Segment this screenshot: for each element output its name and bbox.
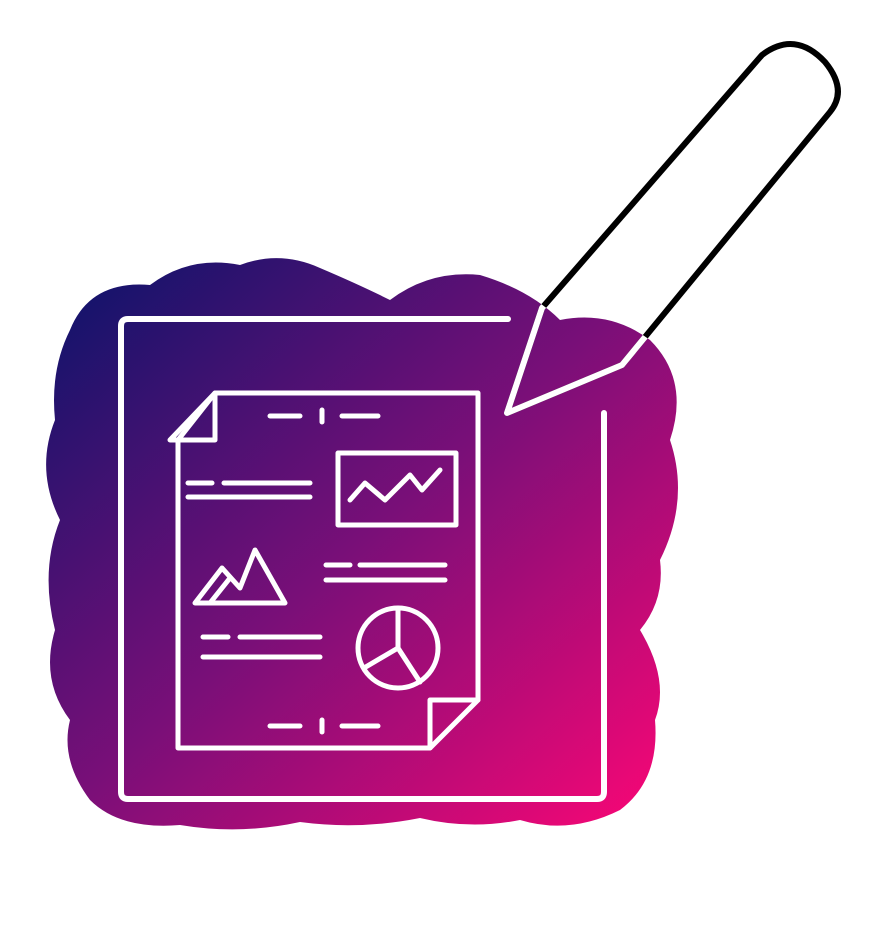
frame — [121, 319, 604, 799]
left text lines — [188, 483, 310, 497]
pie chart — [358, 608, 438, 688]
right text lines — [326, 565, 445, 580]
top dashes — [270, 410, 378, 422]
chart box — [338, 453, 456, 525]
pencil (black outline) — [507, 44, 838, 413]
left bottom text lines — [203, 637, 320, 657]
pencil (white over blob) — [504, 304, 648, 416]
illustration: report document with pencil — [46, 41, 841, 830]
mountains — [195, 550, 285, 603]
document — [170, 393, 478, 748]
bottom dashes — [270, 720, 378, 732]
gradient blob — [46, 258, 678, 829]
